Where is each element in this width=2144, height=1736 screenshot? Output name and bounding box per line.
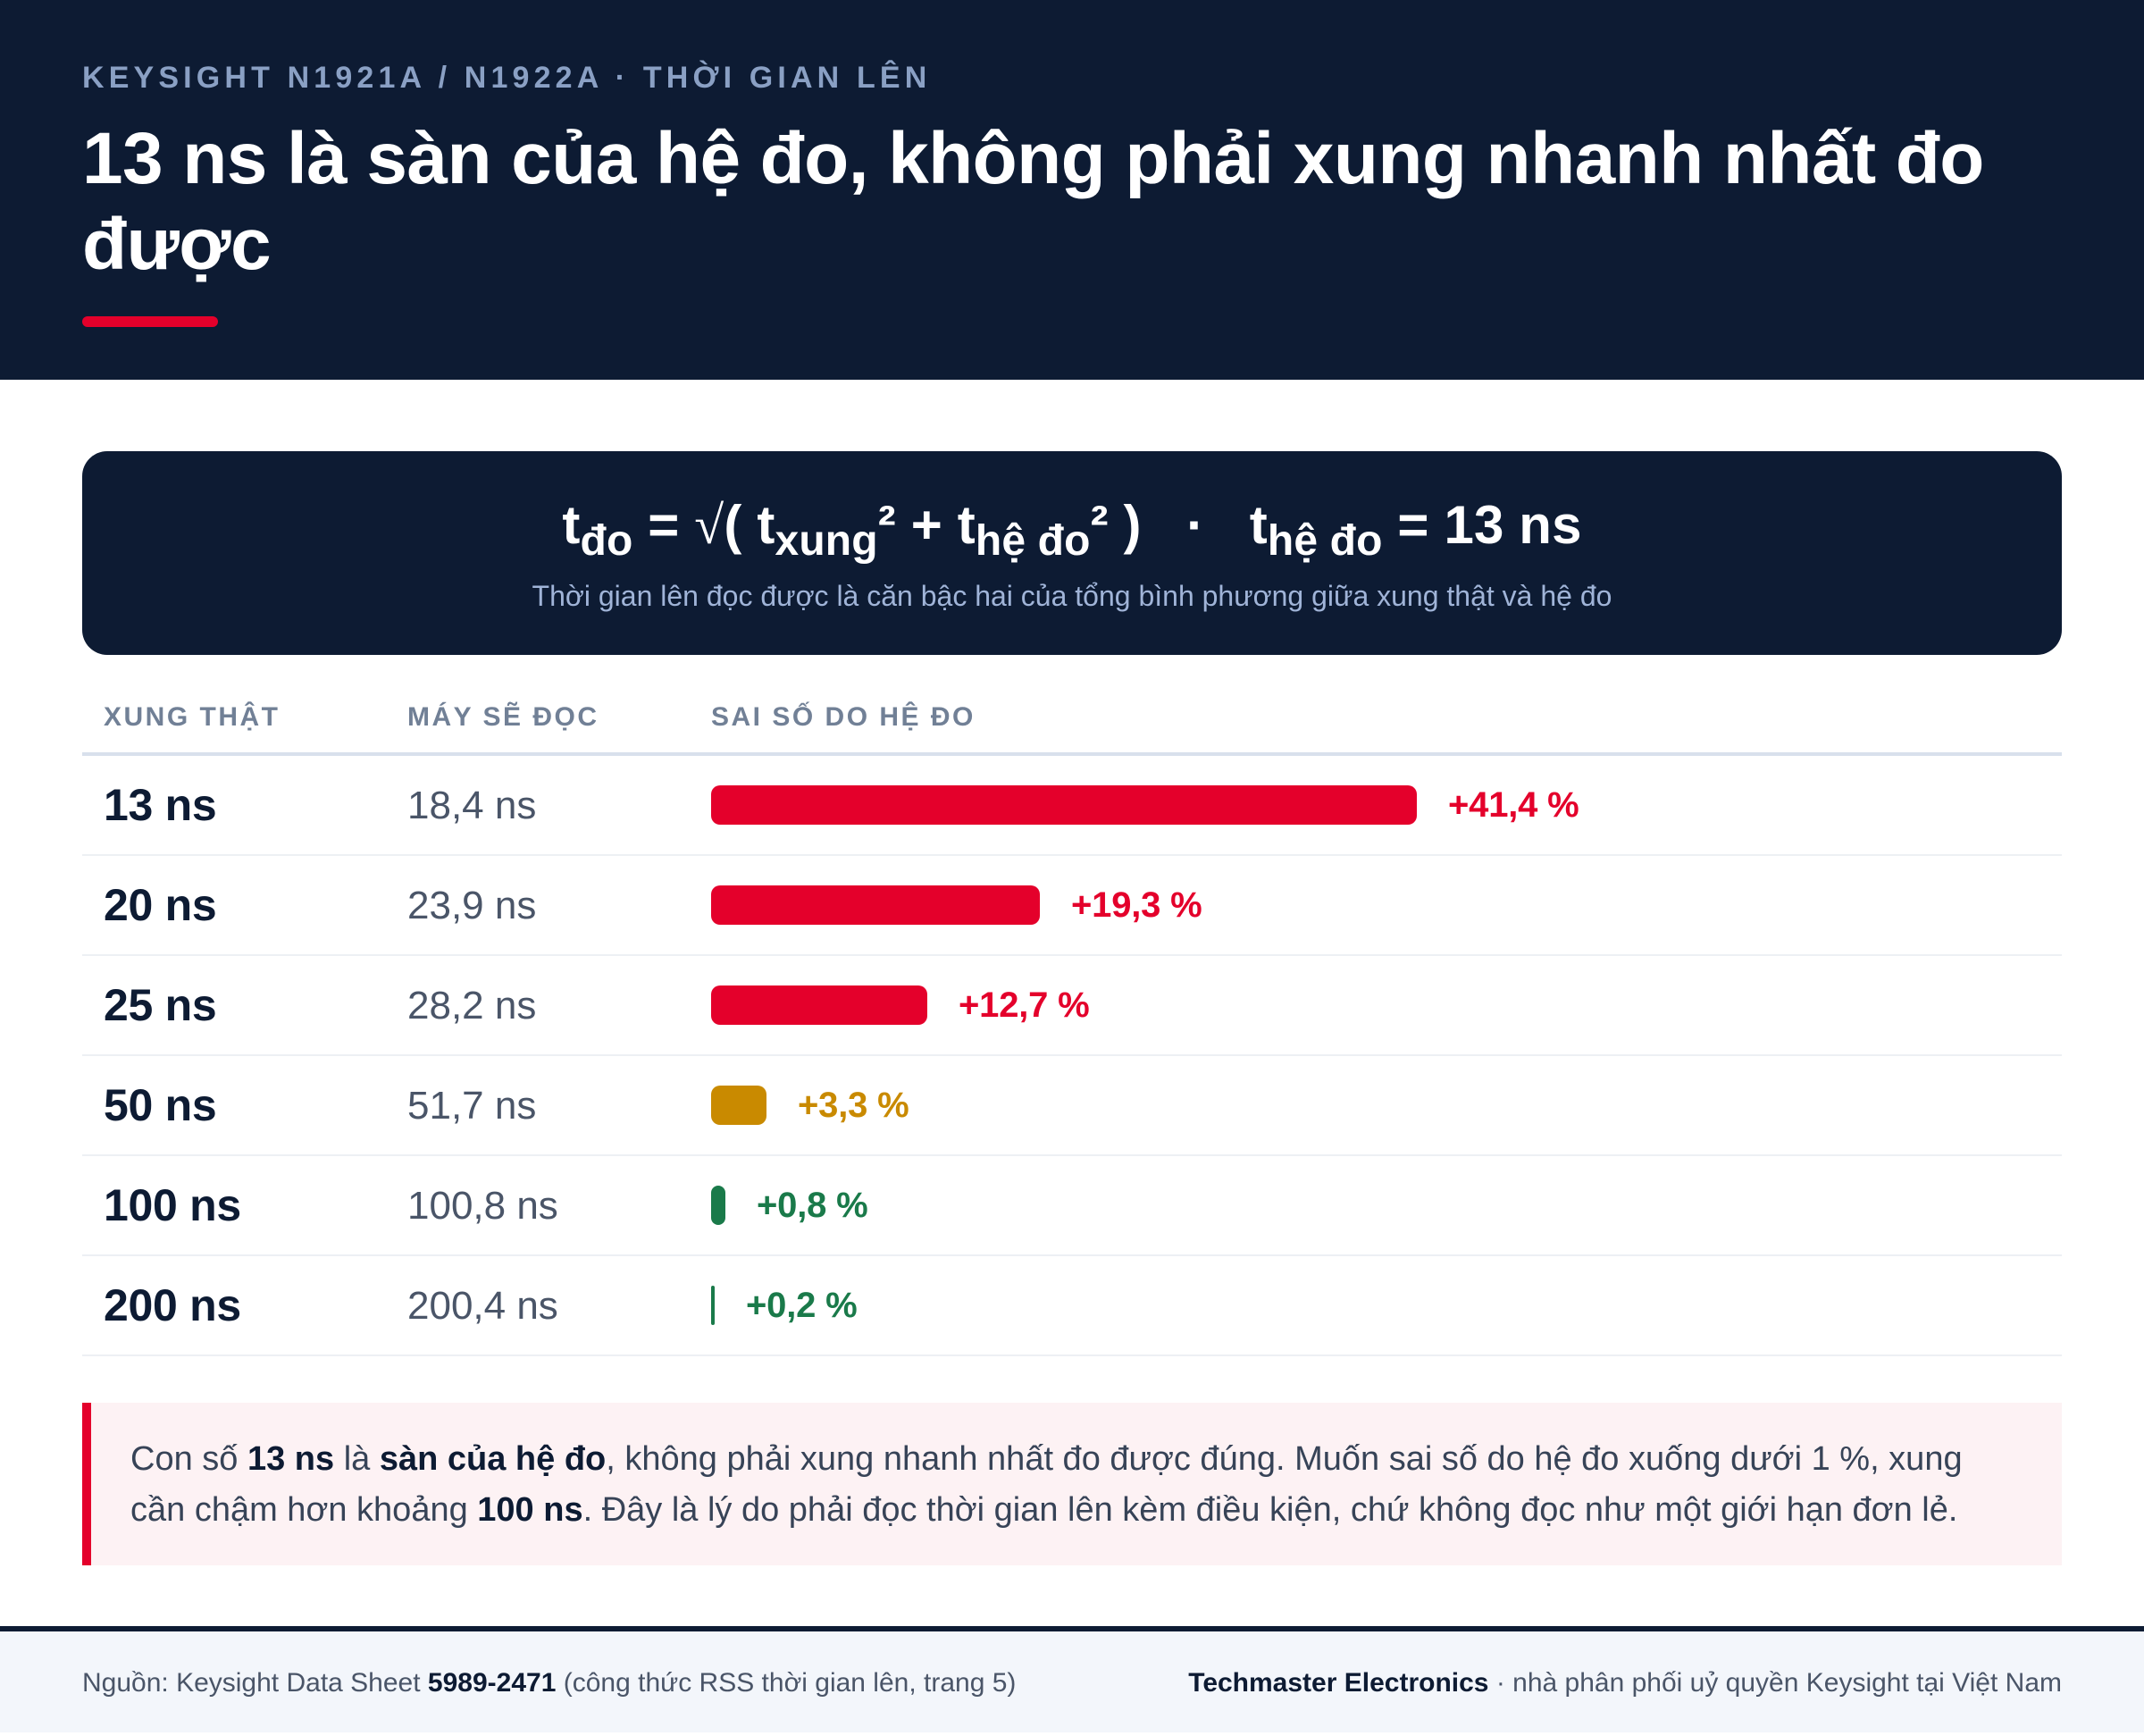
value: 0,2 %: +0,2 % xyxy=(746,1286,857,1325)
row: 100 ns: 100 ns xyxy=(104,1180,241,1230)
footer xyxy=(0,1626,2144,1732)
row: 13 ns: 13 ns xyxy=(104,780,216,830)
formula panel xyxy=(82,451,2062,655)
title: 13 ns là sàn của hệ đo, không phải xung nhanh nhất đo xyxy=(82,118,1984,199)
row: 20 ns xyxy=(82,856,2062,956)
row: 200 ns: 200,4 ns xyxy=(407,1284,558,1328)
row: 200 ns xyxy=(82,1256,2062,1356)
row: 200 ns: 200 ns xyxy=(104,1280,241,1330)
value: 0,8 %: +0,8 % xyxy=(757,1186,867,1225)
source: Nguồn: Keysight Data Sheet 5989-2471 (công thức RSS thời gian lên, trang 5) xyxy=(82,1668,1016,1698)
table header rule xyxy=(82,752,2062,756)
row: 13 ns xyxy=(82,756,2062,856)
row: 25 ns xyxy=(82,956,2062,1056)
formula: tđo = √( txung² + thệ đo² ) · thệ đo = 13 ns xyxy=(562,495,1582,565)
row: 20 ns: 20 ns xyxy=(104,880,216,930)
row: 100 ns xyxy=(82,1156,2062,1256)
bar: 41,4 % xyxy=(711,785,1417,825)
row: 50 ns xyxy=(82,1056,2062,1156)
value: 19,3 %: +19,3 % xyxy=(1071,885,1202,925)
eyebrow: KEYSIGHT N1921A / N1922A · THỜI GIAN LÊN xyxy=(82,61,931,95)
bar: 0,2 % xyxy=(711,1286,715,1325)
row: 50 ns: 51,7 ns xyxy=(407,1084,536,1128)
value: 41,4 %: +41,4 % xyxy=(1448,785,1579,825)
bar: 0,8 % xyxy=(711,1186,725,1225)
column header: reading: MÁY SẼ ĐỌC xyxy=(407,702,599,732)
column header: error: SAI SỐ DO HỆ ĐO xyxy=(711,702,976,732)
row: 13 ns: 18,4 ns xyxy=(407,784,536,827)
formula caption: Thời gian lên đọc được là căn bậc hai của tổng bình phương giữa xung thật và hệ đo xyxy=(532,580,1612,612)
row: 50 ns: 50 ns xyxy=(104,1080,216,1130)
header band xyxy=(0,0,2144,380)
bar: 19,3 % xyxy=(711,885,1040,925)
title xyxy=(82,118,1984,285)
value: 12,7 %: +12,7 % xyxy=(959,985,1090,1025)
title: được xyxy=(82,204,271,285)
callout text xyxy=(130,1440,1963,1529)
callout xyxy=(82,1403,2062,1565)
row: 100 ns: 100,8 ns xyxy=(407,1184,558,1228)
value: 3,3 %: +3,3 % xyxy=(798,1086,909,1125)
callout text: cần chậm hơn khoảng 100 ns. Đây là lý do phải đọc thời gian lên kèm điều kiện, chứ không đọc như một giới hạn đơn lẻ. xyxy=(130,1491,1957,1529)
bar: 3,3 % xyxy=(711,1086,766,1125)
distributor: Techmaster Electronics · nhà phân phối uỷ quyền Keysight tại Việt Nam xyxy=(1188,1668,2062,1698)
row: 25 ns: 28,2 ns xyxy=(407,984,536,1027)
bar: 12,7 % xyxy=(711,985,927,1025)
row: 20 ns: 23,9 ns xyxy=(407,884,536,927)
row: 25 ns: 25 ns xyxy=(104,980,216,1030)
callout text: Con số 13 ns là sàn của hệ đo, không phải xung nhanh nhất đo được đúng. Muốn sai số do hệ đo xuống dưới 1 %, xung xyxy=(130,1440,1963,1478)
accent bar xyxy=(82,316,218,327)
column header: true pulse: XUNG THẬT xyxy=(104,702,281,732)
